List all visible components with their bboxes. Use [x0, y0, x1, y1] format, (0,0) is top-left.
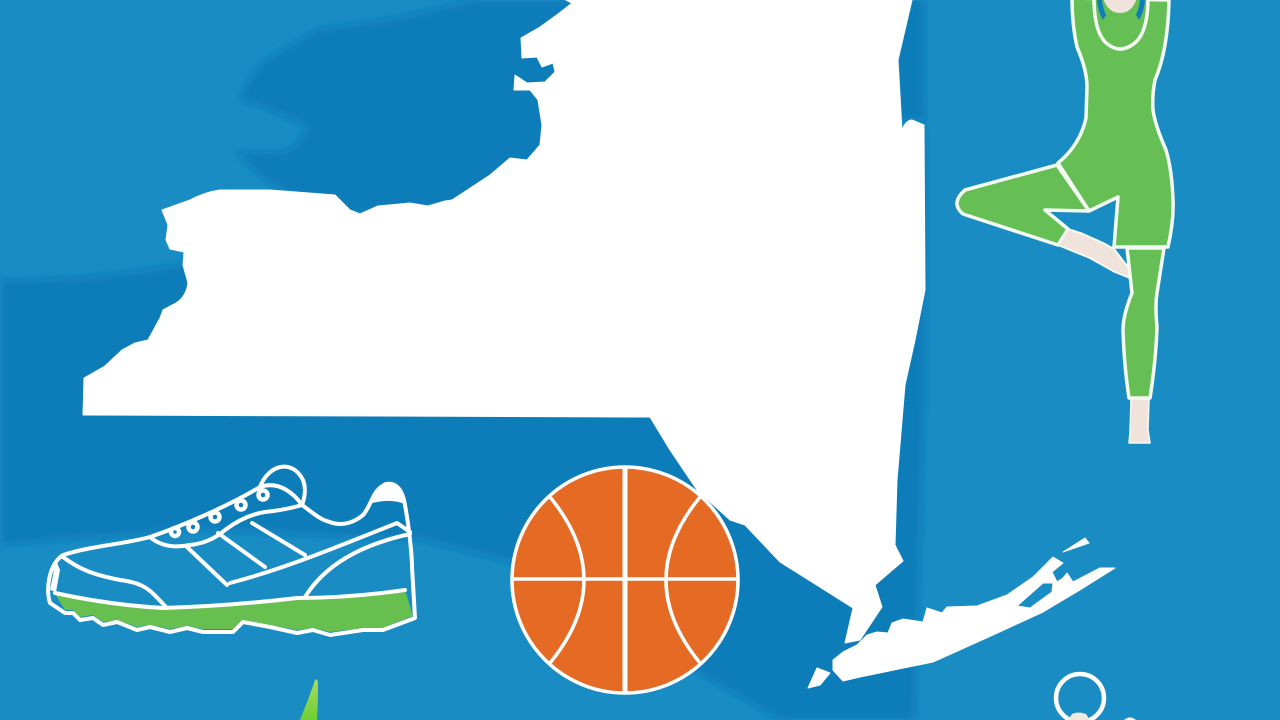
icon: kettlebell — [1056, 674, 1136, 720]
shoe panels — [55, 590, 405, 608]
neck and arm opening — [1094, 0, 1148, 49]
shoe toe and heel fill — [50, 483, 407, 592]
face — [1103, 0, 1137, 13]
torso — [1058, 0, 1173, 247]
bent foot — [1058, 229, 1130, 278]
standing foot — [1129, 399, 1150, 443]
icon: running shoe — [48, 467, 415, 635]
icon: yoga figure in tree pose — [957, 0, 1173, 443]
shoe outline — [48, 467, 415, 635]
thigh — [957, 165, 1089, 245]
shoe laces — [171, 490, 268, 536]
icon: basketball — [512, 467, 738, 693]
shoe sole — [55, 590, 413, 632]
map: New York State — [83, 0, 1115, 688]
map: Long Island — [808, 538, 1115, 688]
icon: green leaf — [300, 680, 318, 720]
standing leg — [1123, 248, 1164, 398]
